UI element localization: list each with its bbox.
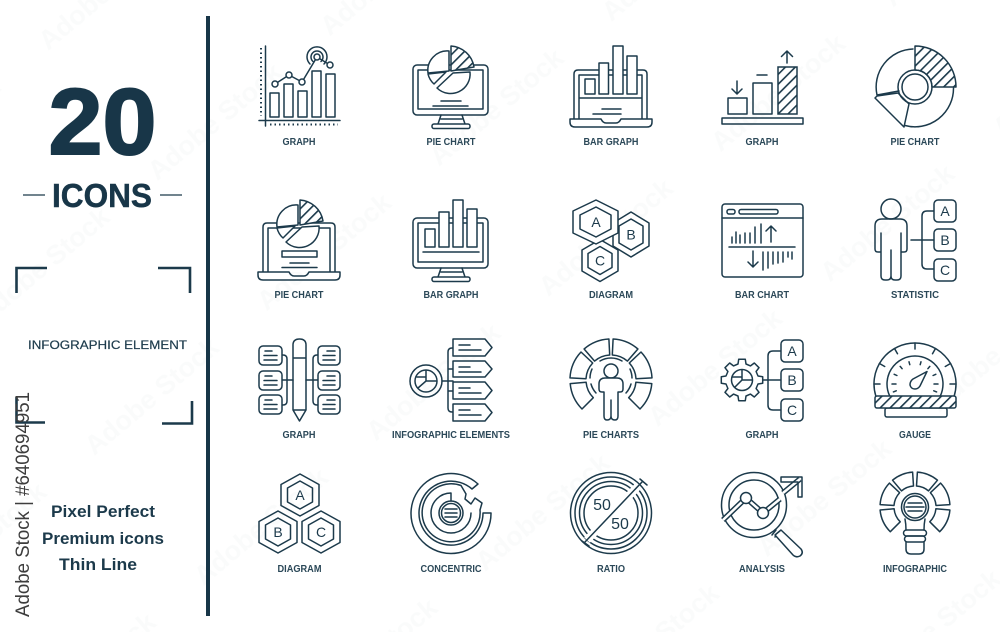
icon: person linked to A B C: C	[940, 262, 950, 278]
label: GRAPH	[282, 137, 316, 148]
icon: three hexagons A B C: C	[316, 524, 326, 540]
icon: 50/50 ring	[570, 472, 652, 554]
features text: Pixel Perfect	[51, 502, 155, 521]
icon: monitor with bars	[413, 200, 488, 282]
label: DIAGRAM	[589, 290, 633, 301]
cell: bar graph monitor	[413, 200, 488, 301]
cell: pie charts person	[570, 339, 652, 441]
icon: pencil with notes	[259, 339, 340, 421]
icon: speedometer gauge	[874, 343, 956, 417]
cell: bar graph laptop	[570, 46, 652, 148]
label: STATISTIC	[891, 290, 939, 301]
heading: 20: 20	[48, 69, 156, 174]
features text	[42, 502, 164, 574]
icon: three hexagons: C	[595, 252, 605, 268]
label: DIAGRAM	[278, 564, 322, 575]
icon: three hexagons A B C: B	[273, 524, 283, 540]
icon: magnifier with trend	[722, 472, 802, 557]
icon: person linked to A B C	[875, 199, 956, 281]
cell: pie chart laptop	[258, 200, 340, 301]
icon: person linked to A B C: A	[940, 203, 950, 219]
label: INFOGRAPHIC ELEMENTS	[392, 430, 510, 441]
label: CONCENTRIC	[420, 564, 482, 575]
icon: gear linked to A B C	[721, 340, 803, 421]
icon: three hexagons: B	[626, 226, 636, 242]
cell: graph	[259, 46, 340, 148]
icon: person within segmented ring	[570, 339, 652, 420]
vertical divider	[206, 16, 210, 616]
icon: laptop with bars	[570, 46, 652, 127]
cell: pencil graph	[259, 339, 340, 441]
icon: 50/50 ring: 50	[593, 497, 611, 514]
cell: graph steps	[722, 51, 803, 148]
icon: three hexagons A B C: A	[295, 487, 305, 503]
cell: ratio	[570, 472, 652, 575]
cell: gauge	[874, 343, 956, 441]
heading: icons: ICONS	[52, 177, 152, 214]
cell: hexagon diagram	[573, 200, 649, 301]
icon: three hexagons A B C	[259, 474, 340, 553]
features text: Premium icons	[42, 529, 164, 548]
label: GRAPH	[746, 430, 778, 441]
cell: donut pie chart	[875, 46, 956, 148]
label: GRAPH	[746, 137, 778, 148]
label: GRAPH	[282, 430, 316, 441]
stock credit: Adobe Stock | #640694951	[13, 392, 34, 617]
icon: gear linked to A B C: B	[787, 372, 797, 388]
label: PIE CHART	[426, 137, 476, 148]
icon: laptop with pie	[258, 200, 340, 280]
icon: gear linked to A B C: C	[787, 402, 797, 418]
icon: line and bar graph	[259, 46, 340, 126]
icon: three hexagons	[573, 200, 649, 282]
label: PIE CHART	[274, 290, 324, 301]
features text: Thin Line	[59, 555, 137, 574]
label: BAR GRAPH	[424, 290, 478, 301]
cell: analysis	[722, 472, 802, 575]
cell: pie chart monitor	[413, 46, 488, 148]
icon: donut pie	[875, 46, 956, 127]
label: PIE CHART	[890, 137, 940, 148]
cell: infographic elements	[392, 339, 510, 441]
frame corners	[16, 268, 192, 424]
cell: infographic bulb	[880, 472, 950, 575]
icon: gear linked to A B C: A	[787, 343, 797, 359]
label: RATIO	[597, 564, 625, 575]
icon: three hexagons: A	[591, 214, 601, 230]
left panel	[13, 69, 192, 617]
icon: concentric rings	[411, 474, 491, 554]
subtitle: INFOGRAPHIC ELEMENT	[28, 338, 188, 352]
label: BAR GRAPH	[584, 137, 638, 148]
icon: pie circle with tags	[410, 339, 492, 421]
icon: 50/50 ring: 50	[611, 516, 629, 533]
label: GAUGE	[899, 430, 931, 441]
icon: rising bars with arrows	[722, 51, 803, 124]
label: INFOGRAPHIC	[883, 564, 947, 575]
icon: browser with up and down bars	[722, 204, 803, 277]
cell: diagram hexagons	[259, 474, 340, 575]
cell: gear graph	[721, 340, 803, 441]
label: PIE CHARTS	[583, 430, 639, 441]
cell: bar chart window	[722, 204, 803, 301]
icon: light bulb with segments	[880, 472, 950, 554]
cell: statistic	[875, 199, 956, 301]
label: ANALYSIS	[739, 564, 785, 575]
cell: concentric	[411, 474, 491, 575]
icon: person linked to A B C: B	[940, 232, 950, 248]
label: BAR CHART	[735, 290, 789, 301]
icon: monitor with pie	[413, 46, 488, 128]
